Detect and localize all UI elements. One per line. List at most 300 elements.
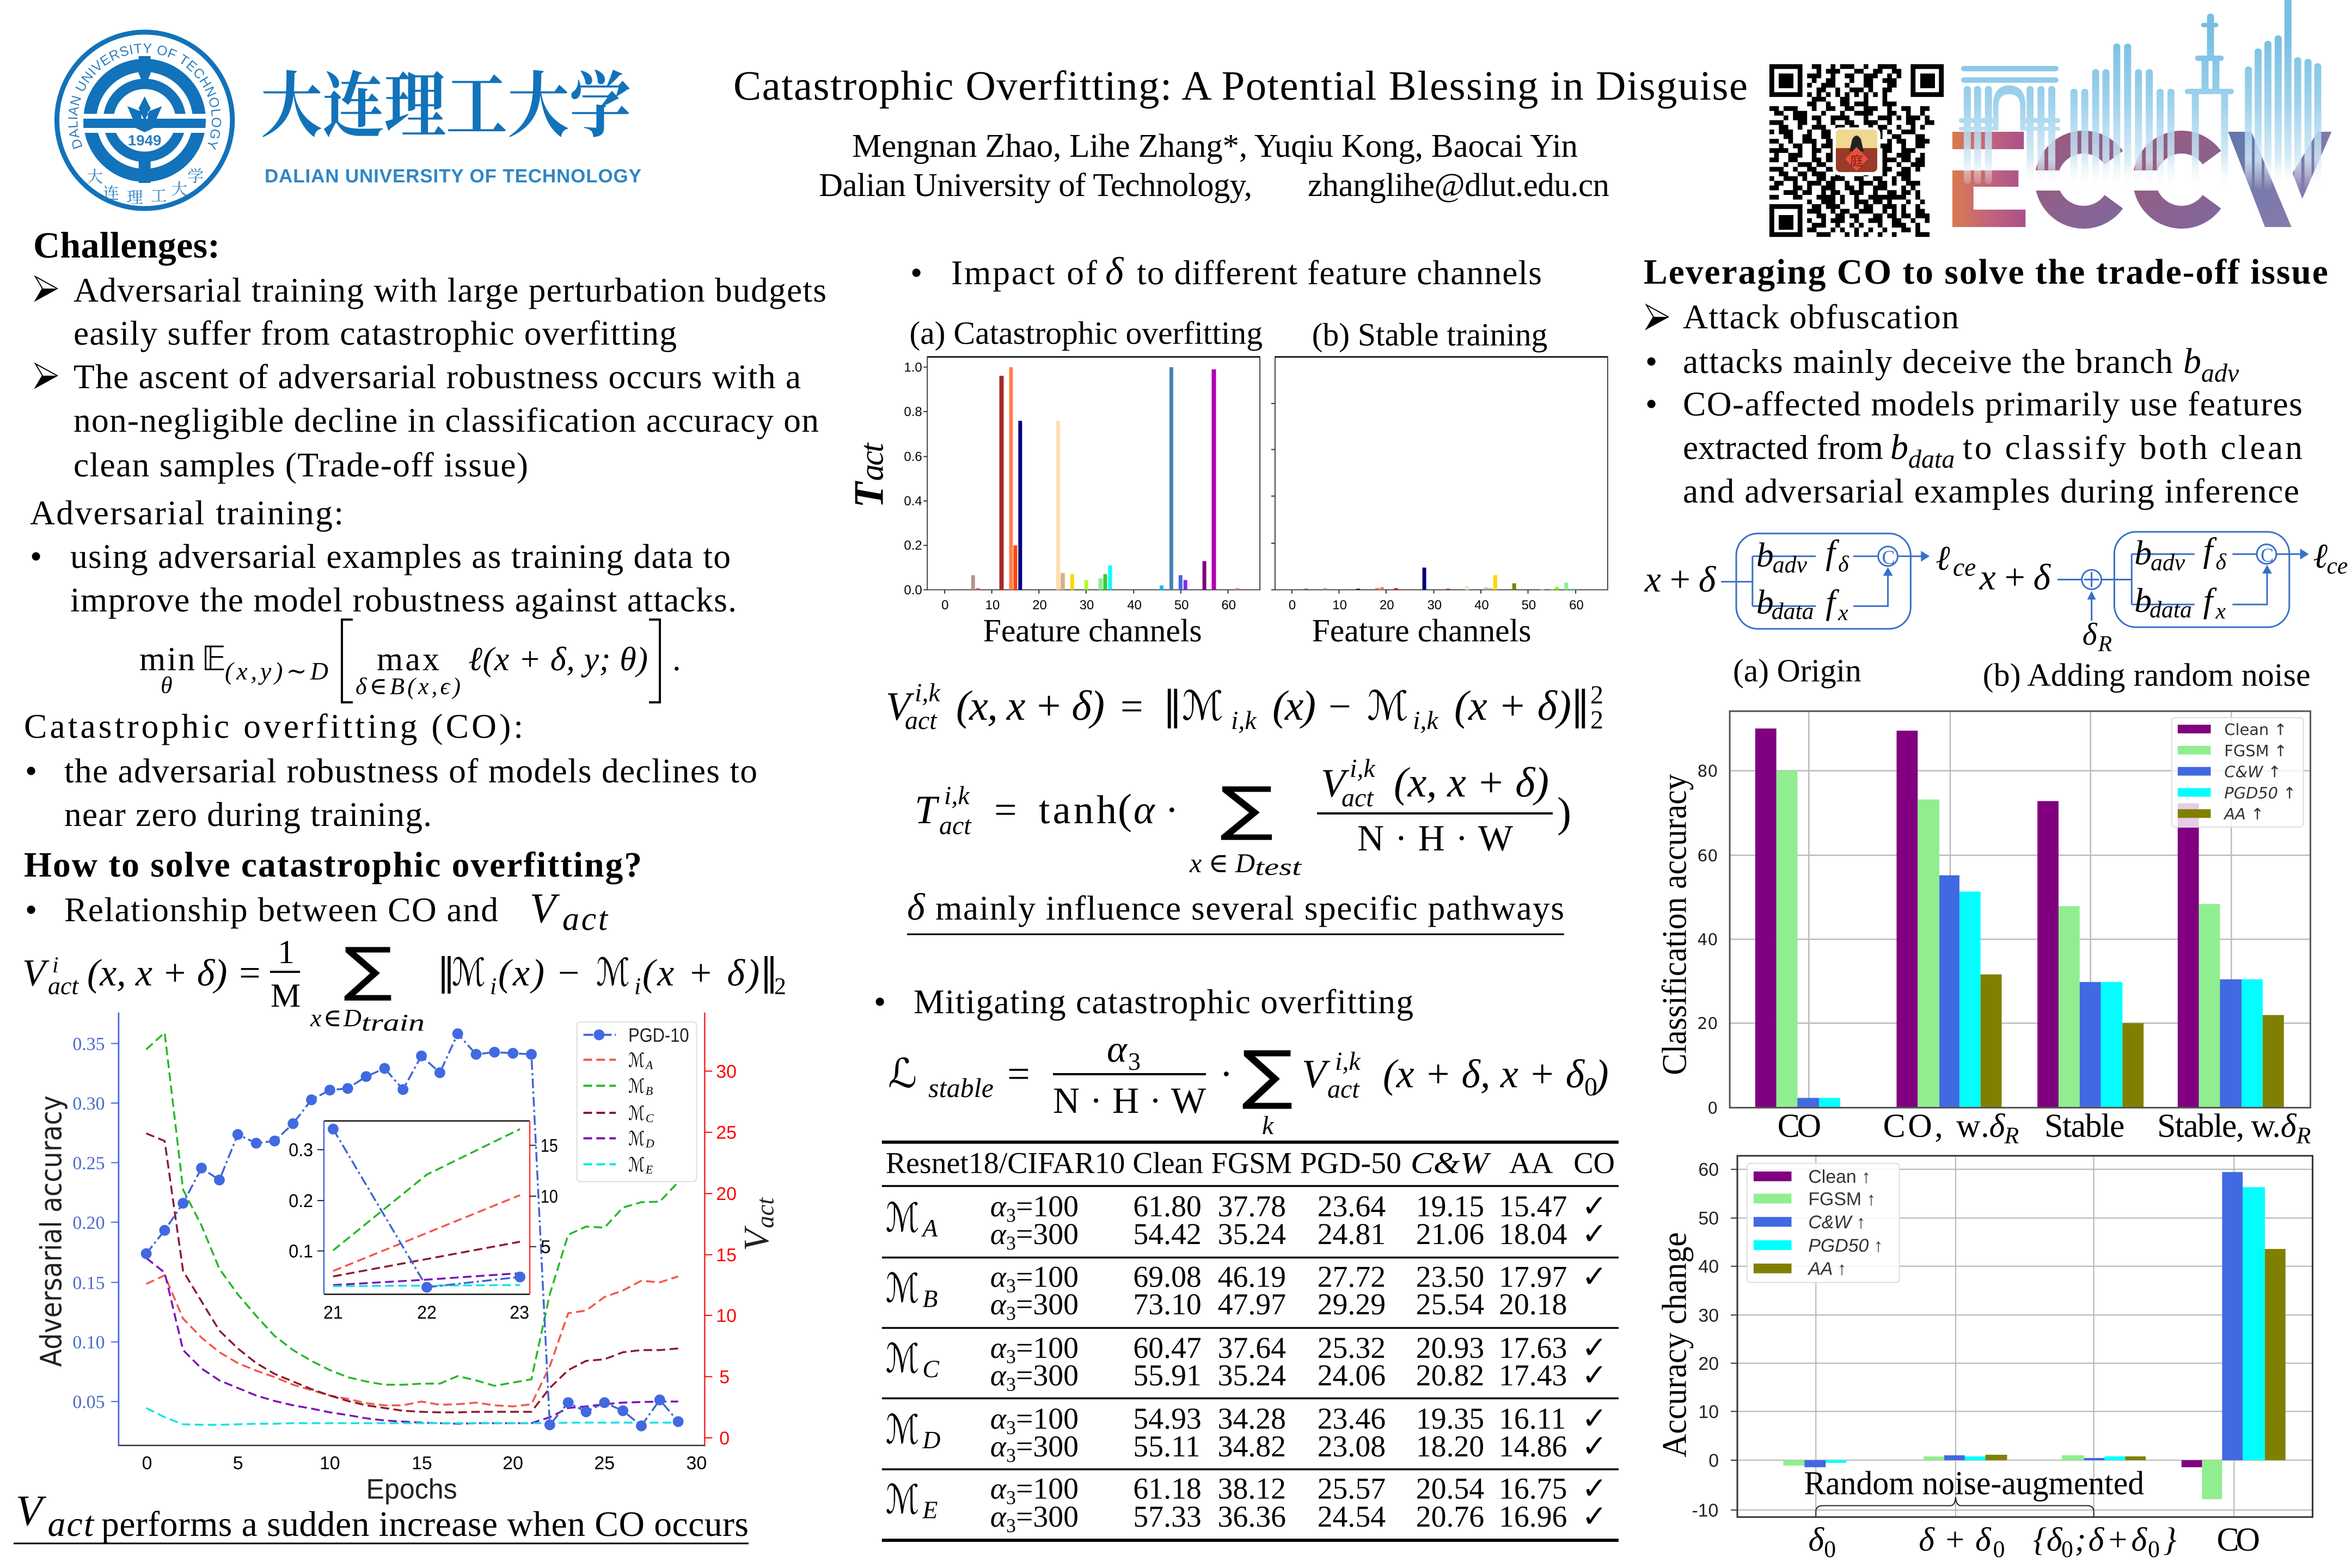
right axis tick labels: 5 bbox=[719, 1367, 730, 1387]
branch labels: f bbox=[1826, 583, 1840, 621]
row M_C: α bbox=[990, 1331, 1007, 1365]
logo: Dalian University of Technology seal: 大 bbox=[87, 168, 103, 186]
y ticks: -10 bbox=[1692, 1500, 1718, 1521]
noise label: δ bbox=[2082, 616, 2098, 652]
text block: bullet CO-affected models: • bbox=[1645, 384, 1657, 423]
legend: E bbox=[645, 1162, 653, 1176]
row M_B: α bbox=[990, 1260, 1007, 1294]
y ticks a: 0.8 bbox=[904, 405, 922, 419]
row M_D: 3 bbox=[1006, 1417, 1016, 1438]
row M_D: α bbox=[990, 1402, 1007, 1436]
loss label: ce bbox=[2326, 553, 2348, 579]
icon: QR code bbox=[1769, 66, 1941, 235]
row M_A: ✓ bbox=[1582, 1189, 1607, 1224]
y ticks a: 1.0 bbox=[904, 360, 922, 375]
formula: V_act i,k: (x + δ) bbox=[1454, 682, 1571, 729]
row M_E: 24.54 bbox=[1318, 1500, 1386, 1534]
logo: Dalian University of Technology seal: 连 bbox=[103, 185, 119, 203]
legend: D bbox=[645, 1137, 654, 1150]
x axis labels: CO, w. bbox=[1883, 1107, 1989, 1144]
formula: L_stable: ℒ bbox=[888, 1050, 917, 1097]
legend: ℳ bbox=[628, 1128, 645, 1150]
x ticks a: 10 bbox=[985, 598, 1000, 612]
row M_D: D bbox=[922, 1426, 940, 1454]
row M_C: α bbox=[990, 1359, 1007, 1392]
row M_A: ✓ bbox=[1582, 1216, 1607, 1252]
right axis tick labels bbox=[716, 1061, 737, 1449]
formula: V_act definition: 2 bbox=[774, 973, 786, 1000]
text block: mitigating overfitting: Mitigating catastrophic overfitting bbox=[914, 982, 1413, 1021]
formula: T_act: test bbox=[1255, 854, 1302, 880]
loss label: ℓ bbox=[2313, 537, 2328, 575]
formula: V_act definition: M bbox=[271, 977, 301, 1014]
row M_D: 34.28 bbox=[1218, 1402, 1286, 1436]
y ticks: 10 bbox=[1698, 1402, 1719, 1422]
y ticks: 60 bbox=[1698, 1160, 1719, 1180]
x ticks a: 20 bbox=[1032, 598, 1047, 612]
concat node bbox=[1878, 547, 1898, 568]
row M_A: =300 bbox=[1016, 1217, 1079, 1251]
inset chart: epochs 21 to 23: 22 bbox=[417, 1302, 437, 1323]
row M_A: α bbox=[990, 1217, 1007, 1251]
y axis title: Classification accuracy bbox=[1655, 774, 1693, 1075]
branch labels: data bbox=[1772, 598, 1814, 624]
text block: adversarial training bullet bbox=[30, 537, 737, 619]
row M_E: ✓ bbox=[1582, 1499, 1607, 1534]
text block: bullet branch b_adv: b bbox=[2183, 341, 2201, 381]
text block: challenge 1 bbox=[35, 271, 826, 352]
x axis labels: Stable bbox=[2044, 1107, 2124, 1144]
loss label: ℓ bbox=[1935, 539, 1950, 577]
formula: T_act: i,k bbox=[944, 781, 970, 810]
row M_D: 23.08 bbox=[1318, 1430, 1386, 1463]
legend: Clean ↑ bbox=[2224, 720, 2287, 739]
formula: min-max objective: δ∈B(x,ϵ) bbox=[356, 673, 461, 700]
panel: leveraging CO bbox=[1644, 253, 2328, 510]
formula: min-max objective: max bbox=[377, 641, 439, 678]
y ticks: 50 bbox=[1698, 1208, 1719, 1229]
formula: min-max objective: 𝔼 bbox=[201, 639, 226, 678]
row M_B: α bbox=[990, 1288, 1007, 1321]
chart heading a: (a) Catastrophic overfitting bbox=[909, 315, 1263, 351]
formula: V_act definition: ∥ bbox=[437, 950, 456, 995]
y axis title: Accuracy change bbox=[1655, 1232, 1693, 1457]
formula: V_act i,k: i,k bbox=[1413, 706, 1439, 735]
row M_D: 54.93 bbox=[1133, 1402, 1202, 1436]
text block: impact of delta: to different feature channels bbox=[1137, 253, 1542, 292]
legend: AA ↑ bbox=[1807, 1259, 1847, 1279]
text block: challenge 2: non-negligible decline in classification accuracy on bbox=[74, 401, 819, 439]
branch labels: x bbox=[1837, 601, 1848, 626]
x ticks b: 0 bbox=[1289, 598, 1296, 612]
formula: V_act i,k: (x, x + δ) bbox=[956, 682, 1105, 729]
loss label bbox=[2313, 537, 2348, 579]
formula: V_act i,k: i,k bbox=[915, 678, 941, 707]
title: Catastrophic Overfitting: A Potential Blessing in Disguise bbox=[733, 63, 1748, 109]
caption: V_act sudden increase: V bbox=[16, 1487, 47, 1535]
row M_B: 17.97 bbox=[1499, 1260, 1567, 1294]
row M_E: 20.76 bbox=[1416, 1500, 1484, 1534]
branch labels: data bbox=[2149, 596, 2192, 623]
x axis labels bbox=[1778, 1107, 2311, 1149]
caption: V_act sudden increase: performs a sudden increase when CO occurs bbox=[101, 1504, 749, 1544]
legend: AA ↑ bbox=[2223, 805, 2264, 823]
x axis labels: 0 bbox=[2148, 1536, 2160, 1563]
formula: T_act: tanh bbox=[1039, 788, 1117, 832]
row M_C: 17.43 bbox=[1499, 1359, 1567, 1392]
series: PGD-10 with markers bbox=[141, 1028, 684, 1431]
legend: C&W ↑ bbox=[1808, 1212, 1866, 1233]
text block: bullet CO-affected models: CO-affected models primarily use features bbox=[1683, 384, 2302, 423]
row M_D: 16.11 bbox=[1499, 1402, 1566, 1436]
row M_E bbox=[886, 1471, 1607, 1536]
series: M_A red bbox=[146, 1275, 678, 1406]
text block: bullet CO-affected models: extracted from bbox=[1683, 428, 1883, 467]
add node bbox=[2082, 570, 2102, 589]
noise label bbox=[2082, 616, 2112, 657]
text block: bullet branch b_adv: attacks mainly deceive the branch bbox=[1683, 342, 2173, 381]
formula: V_act definition: − bbox=[558, 952, 579, 994]
text block: delta influence with underline: mainly influence several specific pathways bbox=[935, 889, 1564, 927]
y axis title bbox=[845, 442, 892, 508]
y ticks: 40 bbox=[1698, 1257, 1719, 1277]
inset chart: epochs 21 to 23 bbox=[289, 1121, 558, 1323]
table header: AA bbox=[1509, 1147, 1553, 1180]
formula: V_act definition: train bbox=[362, 1009, 425, 1036]
axes bbox=[119, 1013, 705, 1445]
chart heading b: (b) Stable training bbox=[1312, 317, 1547, 353]
ECCV letters bbox=[1952, 132, 2331, 227]
x ticks a bbox=[941, 590, 1236, 612]
inset chart: epochs 21 to 23: 23 bbox=[510, 1302, 529, 1323]
row M_D: 55.11 bbox=[1133, 1430, 1200, 1463]
heading: adversarial training: Adversarial training: bbox=[30, 493, 344, 532]
text block: challenge 2 bbox=[35, 357, 819, 484]
x ticks a: 40 bbox=[1127, 598, 1142, 612]
formula: V_act definition bbox=[22, 934, 786, 1036]
logo: ECCV bbox=[1952, 0, 2331, 227]
legend: ℳ bbox=[628, 1075, 645, 1098]
branch labels: adv bbox=[1773, 552, 1807, 578]
row M_A: 18.04 bbox=[1499, 1217, 1567, 1251]
x axis tick labels: 15 bbox=[412, 1453, 432, 1474]
x ticks b: 20 bbox=[1380, 598, 1394, 612]
series: M_C dark red bbox=[146, 1134, 678, 1412]
legend: ℳ bbox=[628, 1102, 645, 1125]
x axis labels: ; δ + δ bbox=[2075, 1521, 2147, 1558]
branch labels: x bbox=[2215, 599, 2226, 624]
text block: impact of delta bbox=[910, 249, 1542, 293]
text block: attack obfuscation: Attack obfuscation bbox=[1683, 297, 1959, 336]
formula: V_act definition: ∑ bbox=[344, 935, 393, 1003]
row M_C: 20.93 bbox=[1416, 1331, 1484, 1365]
legend: PGD50 ↑ bbox=[2224, 784, 2296, 802]
formula: min-max objective: θ bbox=[161, 672, 173, 699]
row M_B: 46.19 bbox=[1218, 1260, 1286, 1294]
row M_E: 16.75 bbox=[1499, 1472, 1567, 1505]
x axis tick labels: 0 bbox=[142, 1453, 152, 1474]
table header: C&W bbox=[1411, 1147, 1491, 1180]
x axis labels bbox=[1808, 1521, 2260, 1563]
left axis tick labels: 0.25 bbox=[72, 1154, 105, 1173]
y ticks: 30 bbox=[1698, 1305, 1719, 1326]
table header bbox=[886, 1147, 1615, 1180]
y ticks a bbox=[904, 360, 927, 597]
row M_B: 20.18 bbox=[1499, 1288, 1567, 1321]
row M_C: 35.24 bbox=[1218, 1359, 1286, 1392]
legend: C&W ↑ bbox=[2224, 763, 2281, 781]
x axis labels: δ bbox=[1808, 1521, 1824, 1558]
caption: V_act sudden increase: act bbox=[48, 1504, 95, 1544]
branch labels: δ bbox=[1838, 552, 1849, 577]
right axis tick labels: 0 bbox=[719, 1428, 730, 1449]
line chart: adversarial accuracy and V_act over epochs: act bbox=[751, 1197, 779, 1228]
row M_A: 37.78 bbox=[1218, 1190, 1286, 1223]
row M_D: 23.46 bbox=[1318, 1402, 1386, 1436]
annotation: random noise-augmented with brace bbox=[1804, 1465, 2144, 1517]
formula: V_act i,k: ∥ bbox=[1570, 683, 1590, 730]
heading: how to solve catastrophic overfitting: How to solve catastrophic overfitting? bbox=[24, 846, 642, 885]
row M_D: 18.20 bbox=[1416, 1430, 1484, 1463]
formula: L_stable bbox=[888, 1028, 1609, 1140]
x axis tick labels: 10 bbox=[320, 1453, 340, 1474]
authors: Mengnan Zhao, Lihe Zhang*, Yuqiu Kong, Baocai Yin bbox=[852, 128, 1578, 164]
row M_D bbox=[886, 1401, 1607, 1466]
table header: FGSM bbox=[1211, 1147, 1292, 1180]
legend: Clean ↑ bbox=[1808, 1167, 1871, 1187]
row M_A: =100 bbox=[1016, 1190, 1079, 1223]
panel: adversarial training bbox=[30, 493, 737, 702]
legend: A bbox=[645, 1058, 653, 1071]
concat node bbox=[2257, 544, 2276, 566]
formula: V_act definition: (x) bbox=[498, 952, 544, 994]
row M_B: ✓ bbox=[1582, 1259, 1607, 1294]
table header: CO bbox=[1573, 1147, 1615, 1180]
formula: min-max objective: min bbox=[139, 641, 195, 678]
formula: V_act i,k: i,k bbox=[1231, 706, 1257, 735]
formula: T_act: · bbox=[1165, 788, 1179, 832]
x axis labels: Stable, w. bbox=[2157, 1107, 2281, 1144]
row M_E: α bbox=[990, 1472, 1007, 1505]
formula: T_act: V bbox=[1321, 761, 1350, 806]
logo: university name in English: DALIAN UNIVERSITY OF TECHNOLOGY bbox=[265, 166, 641, 187]
row M_A: 24.81 bbox=[1318, 1217, 1386, 1251]
x axis labels: R bbox=[2004, 1122, 2019, 1149]
input label: x + δ bbox=[1979, 556, 2051, 597]
x axis labels: CO bbox=[2217, 1521, 2260, 1558]
formula: V_act definition: 1 bbox=[278, 934, 295, 971]
formula: V_act definition: ℳ bbox=[452, 950, 486, 995]
row M_D: ✓ bbox=[1582, 1429, 1607, 1464]
text block: bullet CO-affected models: and adversarial examples during inference bbox=[1683, 471, 2299, 510]
legend: C bbox=[646, 1111, 654, 1125]
y ticks: 60 bbox=[1697, 847, 1718, 866]
formula: V_act i,k: = bbox=[1120, 684, 1143, 729]
bars: combined bbox=[2062, 1455, 2146, 1460]
y ticks: 40 bbox=[1697, 930, 1718, 950]
row M_E: E bbox=[922, 1496, 938, 1523]
row M_B: 23.50 bbox=[1416, 1260, 1484, 1294]
formula: V_act definition: act bbox=[48, 972, 79, 1000]
row M_A: 3 bbox=[1006, 1232, 1016, 1254]
formula: V_act definition: ∥ bbox=[759, 950, 779, 995]
y ticks a: 0.0 bbox=[904, 583, 922, 597]
inset chart: epochs 21 to 23: 10 bbox=[541, 1186, 558, 1207]
row M_E: ✓ bbox=[1582, 1471, 1607, 1506]
row M_E: 36.36 bbox=[1218, 1500, 1286, 1534]
caption: V_act sudden increase bbox=[14, 1487, 749, 1544]
formula: T_act: ( bbox=[1118, 785, 1132, 832]
row M_A: 3 bbox=[1006, 1204, 1016, 1226]
line chart: adversarial accuracy and V_act over epochs bbox=[34, 1013, 779, 1505]
formula: V_act i,k bbox=[886, 678, 1603, 735]
y ticks: 80 bbox=[1697, 762, 1718, 781]
row M_A: ℳ bbox=[886, 1195, 919, 1241]
y ticks a: 0.4 bbox=[904, 494, 922, 509]
inset chart: epochs 21 to 23: 5 bbox=[541, 1237, 551, 1258]
row M_D: 19.35 bbox=[1416, 1402, 1484, 1436]
row M_C: 24.06 bbox=[1318, 1359, 1386, 1392]
legend bbox=[577, 1022, 696, 1181]
text block: impact of delta: δ bbox=[1105, 249, 1124, 293]
formula: L_stable: (x + δ, x + δ bbox=[1383, 1052, 1585, 1097]
x axis labels: 0 bbox=[1824, 1536, 1836, 1563]
formula: L_stable: stable bbox=[928, 1073, 994, 1103]
panel: catastrophic overfitting bbox=[24, 707, 757, 834]
row M_C: 60.47 bbox=[1133, 1331, 1202, 1365]
bars: delta 0 bbox=[1784, 1460, 1846, 1467]
row M_B: 47.97 bbox=[1218, 1288, 1286, 1321]
y ticks b bbox=[1271, 403, 1275, 590]
row M_C: =300 bbox=[1016, 1359, 1079, 1392]
row M_D: =100 bbox=[1016, 1402, 1079, 1436]
right axis tick labels: 25 bbox=[716, 1123, 737, 1143]
affiliation and email: zhanglihe@dlut.edu.cn bbox=[1308, 167, 1609, 204]
formula: V_act i,k: − bbox=[1328, 684, 1351, 729]
left axis tick labels: 0.05 bbox=[72, 1392, 105, 1412]
text block: challenge 1: Adversarial training with large perturbation budgets bbox=[74, 271, 826, 309]
row M_B: B bbox=[922, 1284, 938, 1312]
bars: stable bbox=[2037, 801, 2143, 1107]
formula: T_act: N · H · W bbox=[1357, 817, 1514, 859]
row M_E: 25.57 bbox=[1318, 1472, 1386, 1505]
formula: T_act: act bbox=[1342, 783, 1374, 812]
formula: L_stable: 3 bbox=[1128, 1048, 1141, 1075]
caption a: (a) Origin bbox=[1733, 653, 1861, 688]
panel: how to solve bbox=[22, 846, 786, 1036]
loss label bbox=[1935, 539, 1976, 581]
row M_D: =300 bbox=[1016, 1430, 1079, 1463]
row M_E: =300 bbox=[1016, 1500, 1079, 1534]
row M_A: 19.15 bbox=[1416, 1190, 1484, 1223]
diagram: adding random noise bbox=[1979, 531, 2348, 693]
left axis tick labels: 0.20 bbox=[72, 1213, 105, 1233]
arrow: to loss bbox=[1883, 551, 1930, 576]
legend: FGSM ↑ bbox=[2224, 742, 2287, 760]
logo: university name in Chinese: 大连理工大学 bbox=[261, 48, 631, 151]
right axis tick labels: 15 bbox=[716, 1245, 737, 1266]
icon: QR centre photo: 庭 bbox=[1850, 150, 1863, 169]
legend bbox=[2172, 718, 2304, 827]
formula: T_act: i,k bbox=[1350, 754, 1376, 783]
bars b bbox=[1304, 568, 1578, 590]
row M_B: 3 bbox=[1006, 1275, 1016, 1296]
text block: CO bullet: near zero during training. bbox=[64, 795, 432, 834]
right axis title: V bbox=[737, 1226, 776, 1251]
heading: Challenges: Challenges: bbox=[33, 224, 220, 266]
row M_B bbox=[886, 1259, 1607, 1324]
row M_E: 3 bbox=[1006, 1515, 1016, 1536]
formula: T_act: ) bbox=[1557, 788, 1571, 836]
bars a bbox=[971, 367, 1239, 590]
formula: V_act i,k: ∥ bbox=[1162, 683, 1183, 730]
formula: V_act i,k: (x) bbox=[1272, 682, 1316, 729]
text block: delta influence with underline: δ bbox=[907, 886, 926, 928]
row M_B: 69.08 bbox=[1133, 1260, 1202, 1294]
y ticks bbox=[1697, 762, 1718, 1118]
row M_C bbox=[886, 1330, 1607, 1395]
row M_E: ℳ bbox=[886, 1477, 919, 1523]
row M_B: 73.10 bbox=[1133, 1288, 1202, 1321]
row M_D: α bbox=[990, 1430, 1007, 1463]
row M_E: 20.54 bbox=[1416, 1472, 1484, 1505]
left axis tick labels: 0.30 bbox=[72, 1094, 105, 1114]
y ticks: 20 bbox=[1698, 1353, 1719, 1374]
panel: challenges bbox=[33, 224, 826, 484]
formula: L_stable: · bbox=[1220, 1052, 1233, 1097]
bars: CO bbox=[1755, 728, 1840, 1107]
legend: PGD50 ↑ bbox=[1808, 1235, 1883, 1256]
legend: FGSM ↑ bbox=[1808, 1189, 1876, 1209]
row M_D: 3 bbox=[1006, 1444, 1016, 1466]
bars: CO bbox=[2182, 1172, 2286, 1499]
text block: bullet CO-affected models bbox=[1645, 384, 2302, 510]
legend: ℳ bbox=[628, 1154, 645, 1176]
row M_A bbox=[886, 1189, 1607, 1254]
left axis tick labels: 0.10 bbox=[72, 1333, 105, 1353]
row M_B: ℳ bbox=[886, 1265, 919, 1312]
y ticks a: 0.2 bbox=[904, 538, 922, 553]
legend: ℳ bbox=[628, 1050, 645, 1071]
x ticks b: 40 bbox=[1474, 598, 1489, 612]
inset chart: epochs 21 to 23: 0.3 bbox=[289, 1140, 313, 1161]
row M_C: =100 bbox=[1016, 1331, 1079, 1365]
formula: min-max objective: ℓ(x + δ, y; θ) bbox=[468, 641, 648, 678]
legend: B bbox=[646, 1084, 653, 1098]
formula: min-max objective: (x,y)∼D bbox=[225, 657, 328, 685]
row M_C: 17.63 bbox=[1499, 1331, 1567, 1365]
skyline bbox=[1959, 0, 2322, 191]
loss label: ce bbox=[1953, 553, 1976, 581]
formula: L_stable: ) bbox=[1593, 1052, 1609, 1097]
bar chart: classification accuracy bbox=[1655, 711, 2311, 1149]
series: M_B green bbox=[146, 1033, 678, 1386]
formula: V_act definition: V bbox=[22, 952, 50, 994]
formula: L_stable: k bbox=[1262, 1111, 1275, 1140]
row M_A: 54.42 bbox=[1133, 1217, 1202, 1251]
text block: CO bullet: the adversarial robustness of models declines to bbox=[64, 751, 757, 790]
formula: V_act definition: i bbox=[52, 953, 59, 978]
table header: Resnet18/CIFAR10 bbox=[886, 1147, 1125, 1180]
text block: CO bullet bbox=[25, 751, 757, 834]
x axis labels: R bbox=[2296, 1122, 2311, 1149]
logo: Dalian University of Technology seal: 大 bbox=[171, 181, 187, 199]
text block: relationship bullet: V bbox=[530, 884, 560, 932]
caption b: (b) Adding random noise bbox=[1983, 657, 2311, 693]
annotation: random noise-augmented with brace: Random noise-augmented bbox=[1804, 1465, 2144, 1502]
inset chart: epochs 21 to 23: 15 bbox=[541, 1136, 558, 1156]
legend: PGD-10 bbox=[628, 1024, 689, 1046]
